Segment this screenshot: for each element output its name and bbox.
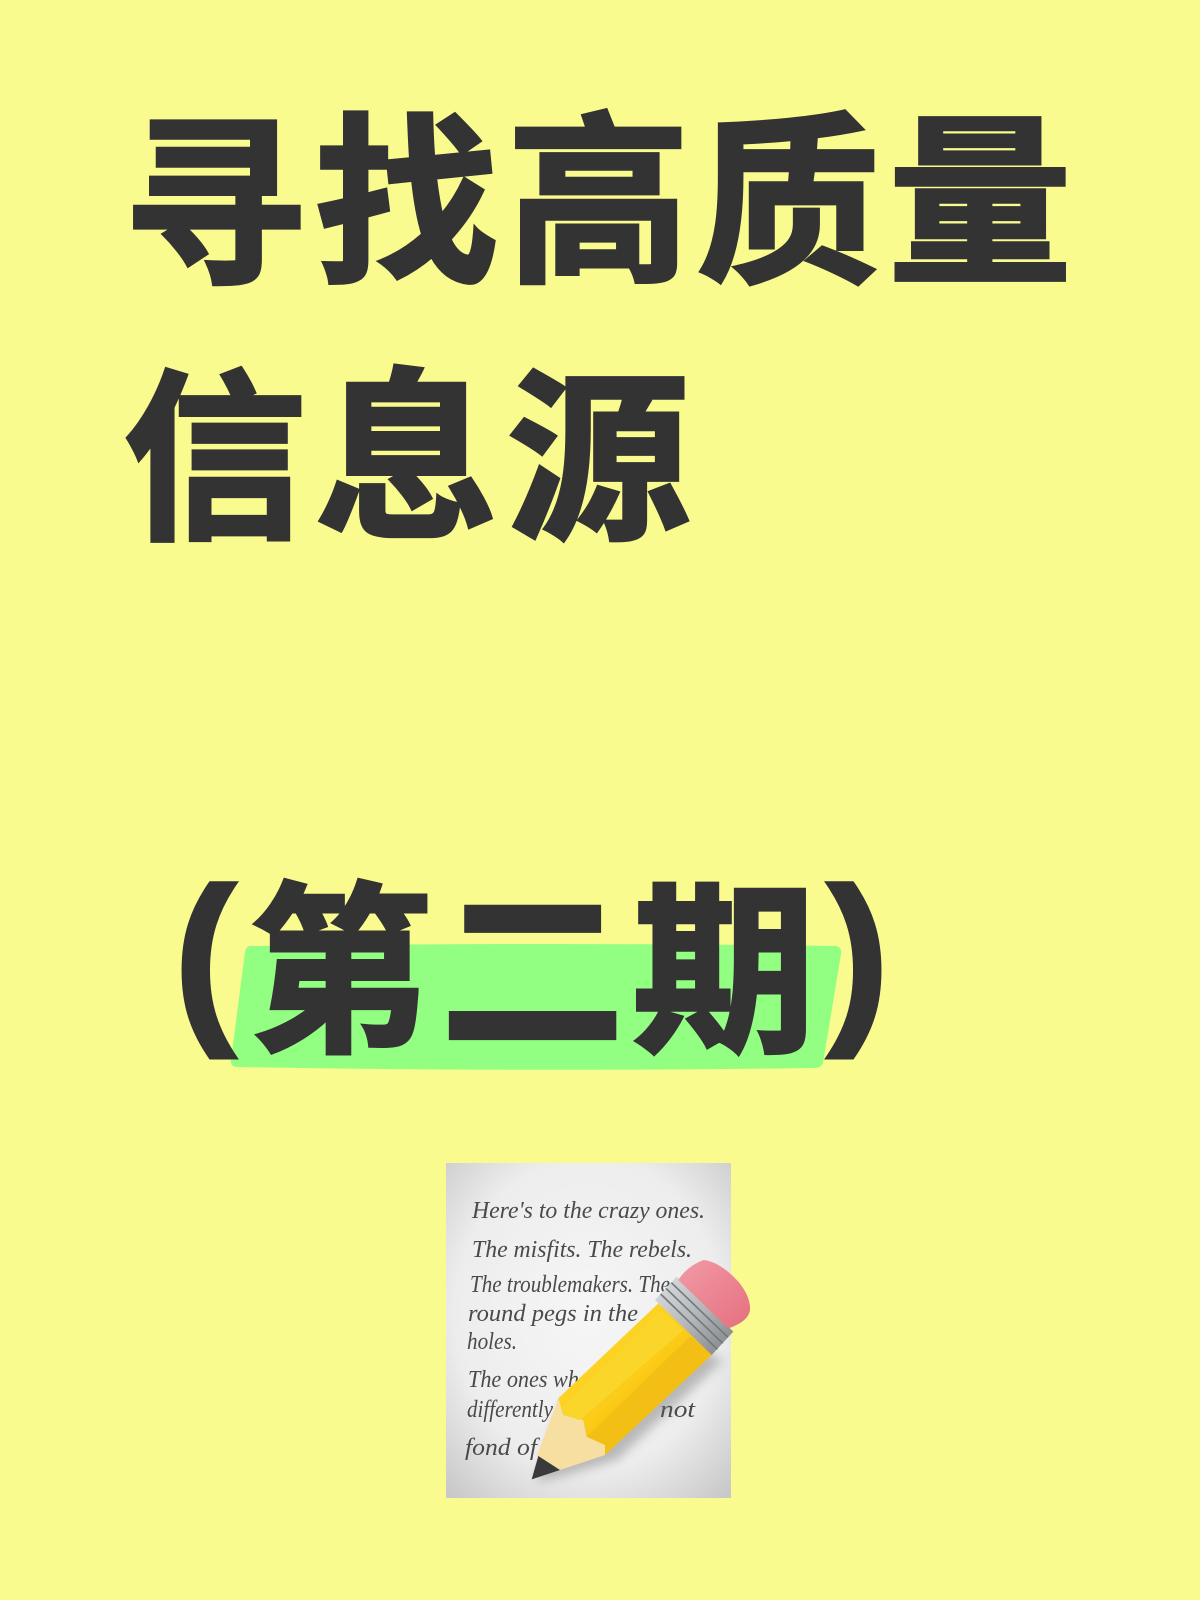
title: 息 (315, 357, 498, 562)
handwriting: round pegs in the (468, 1301, 638, 1327)
title: 找 (315, 102, 498, 307)
handwriting: The ones who (468, 1367, 590, 1393)
handwriting: not (660, 1397, 697, 1423)
subtitle (174, 849, 889, 1076)
handwriting: holes. (467, 1329, 517, 1355)
title (123, 101, 1072, 563)
paper (446, 1163, 731, 1498)
icon: note and pencil (446, 1163, 750, 1498)
handwriting: The misfits. The rebels. (472, 1237, 692, 1263)
title: 量 (888, 102, 1072, 307)
title: 信 (123, 358, 307, 563)
title: 质 (697, 102, 880, 307)
handwriting: fond of (465, 1435, 541, 1461)
title: 高 (507, 101, 690, 306)
subtitle: 二 (441, 871, 624, 1076)
subtitle: 期 (632, 871, 816, 1076)
subtitle: ) (827, 849, 889, 1059)
handwriting: The troublemakers. The (470, 1272, 670, 1298)
pencil (532, 1260, 750, 1482)
subtitle: 第 (249, 871, 432, 1076)
handwriting (465, 1198, 705, 1461)
handwriting: differently (467, 1397, 553, 1423)
title: 源 (507, 358, 690, 563)
title: 寻 (123, 103, 306, 308)
handwriting: Here's to the crazy ones. (471, 1198, 705, 1224)
subtitle: ( (174, 849, 237, 1059)
green highlight (231, 944, 841, 1070)
